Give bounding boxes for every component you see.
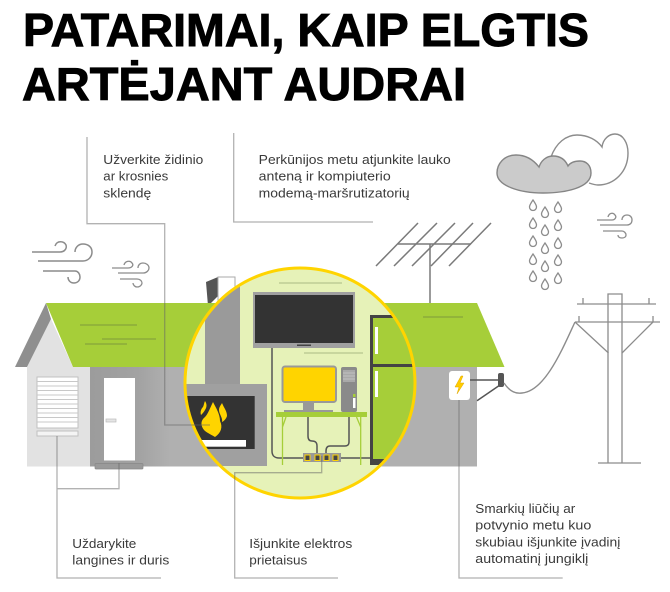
roof [15, 303, 504, 367]
text: appliances tip: Išjunkite elektros [249, 536, 353, 551]
power strip [303, 453, 341, 462]
text: main breaker tip: skubiau išjunkite įvadinį [475, 534, 620, 549]
window shutters [37, 377, 78, 436]
text: shutters tip: langines ir duris [72, 553, 170, 568]
icon: TV antenna [376, 223, 491, 303]
text: damper tip: ar krosnies [103, 169, 169, 184]
fireplace [186, 286, 267, 466]
door [95, 378, 143, 469]
text: main breaker tip: Smarkių liūčių ar [475, 501, 576, 516]
icon: utility pole [575, 294, 660, 463]
house [15, 277, 504, 469]
chimney outside [206, 277, 235, 307]
icon: wind left large [32, 242, 92, 283]
leader lines [57, 133, 563, 578]
icon: storm clouds [497, 134, 628, 193]
text: main breaker tip [475, 501, 620, 566]
text: damper tip [103, 152, 203, 200]
text: antenna tip: Perkūnijos metu atjunkite lauko [259, 152, 451, 167]
text: main breaker tip: potvynio metu kuo [475, 518, 591, 533]
title: ARTĖJANT AUDRAI [22, 58, 466, 110]
text: damper tip: sklendę [103, 185, 151, 200]
icon: wind left small [112, 261, 149, 287]
title [22, 4, 589, 110]
text: antenna tip: modemą-maršrutizatorių [259, 185, 410, 200]
meter box with lightning icon [449, 371, 470, 400]
fridge [370, 315, 414, 465]
icon: wind right [597, 213, 632, 238]
text: damper tip: Užverkite židinio [103, 152, 203, 167]
text: main breaker tip: automatinį jungiklį [475, 551, 588, 566]
text: antenna tip: anteną ir kompiuterio [259, 169, 391, 184]
text: appliances tip: prietaisus [249, 553, 308, 568]
icon: raindrops [530, 200, 562, 290]
icon: flame [201, 401, 227, 437]
text: antenna tip [259, 152, 451, 200]
TV [253, 283, 363, 353]
cables [272, 348, 370, 458]
walls [27, 319, 477, 466]
panel: magnified interior circle [180, 260, 430, 498]
power connector and cable [470, 322, 575, 401]
title: PATARIMAI, KAIP ELGTIS [23, 4, 589, 56]
text: appliances tip [249, 536, 353, 568]
text: shutters tip: Uždarykite [72, 536, 136, 551]
text: shutters tip [72, 536, 170, 568]
desk with computer [276, 366, 367, 465]
